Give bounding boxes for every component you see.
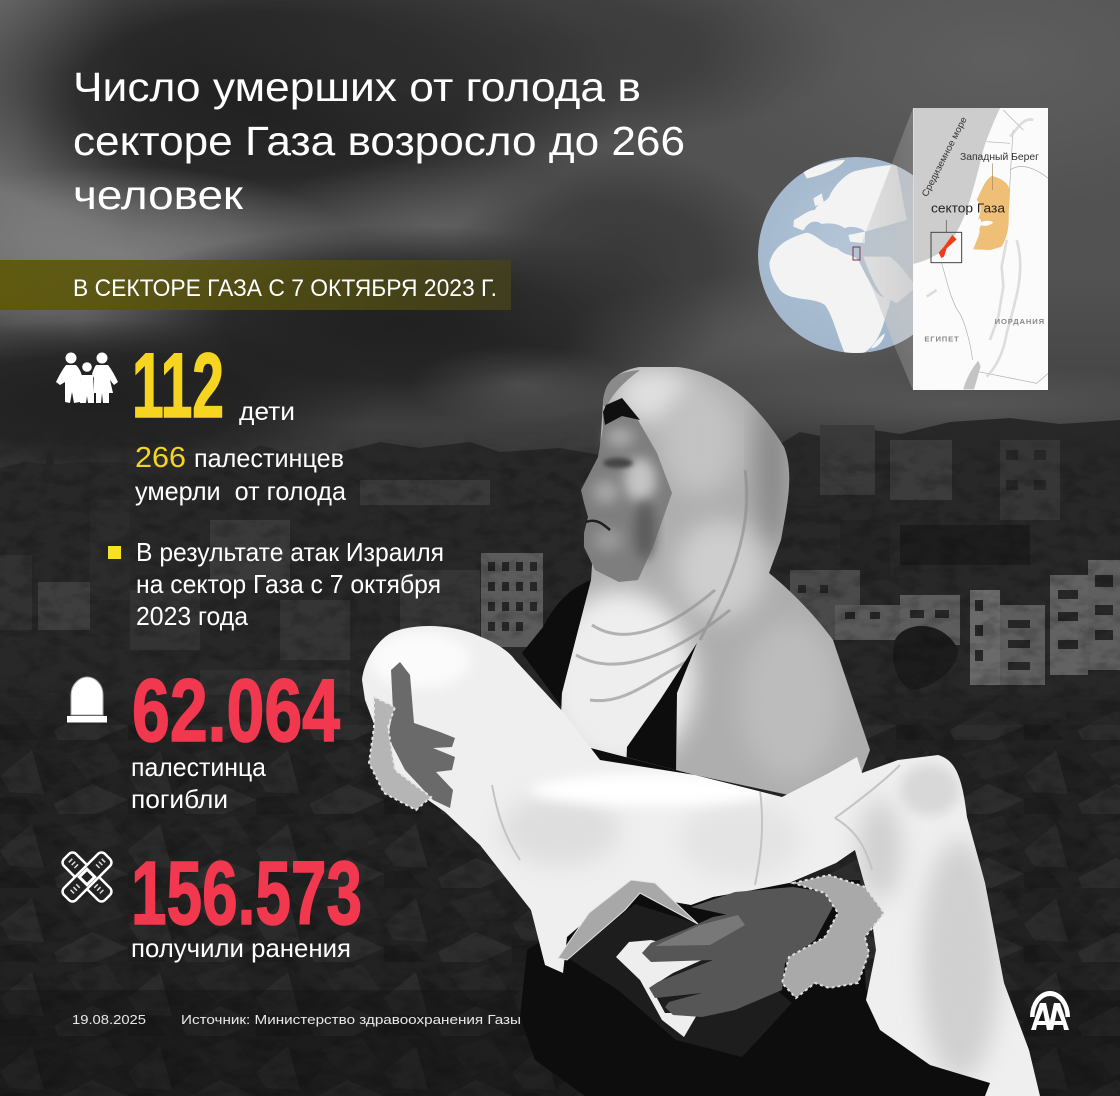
buildings: [0, 425, 1120, 760]
mediterranean sea: [913, 107, 1001, 264]
title: Число умерших от голода в: [73, 64, 641, 110]
dark cap under hood: [603, 398, 640, 425]
banner: since 7 October 2023: [0, 260, 511, 310]
footer: date and source: Источник: Министерство здравоохранения Газы: [181, 1012, 521, 1027]
map cone over globe: [860, 164, 913, 346]
banner: since 7 October 2023: В СЕКТОРЕ ГАЗА С 7 ОКТЯБРЯ 2023 Г.: [73, 275, 497, 302]
footer: date and source: 19.08.2025: [72, 1012, 146, 1027]
text: 266 palestinians starved: умерли от голода: [135, 476, 347, 506]
bullet text: attacks since 7 October: 2023 года: [136, 601, 249, 631]
left lace cuff: [369, 697, 431, 810]
text: 266 palestinians starved: 266: [135, 442, 186, 474]
gaza label: сектор Газа: [931, 202, 1006, 216]
skyline silhouette: [0, 418, 1120, 700]
sea label: Средиземное море: [920, 115, 969, 198]
bullet text: attacks since 7 October: В результате атак Израиля: [136, 537, 444, 567]
icon: crossed bandages: [46, 836, 128, 918]
face: [581, 410, 672, 582]
purse: [558, 880, 792, 1057]
number: 62.064 killed: [131, 660, 340, 814]
child wrapped in white cloth: [350, 615, 1050, 1096]
number: 112 children: 112: [132, 335, 224, 437]
gulf of aqaba: [963, 361, 981, 389]
west bank: [973, 176, 1009, 250]
map graphic: globe and inset: [758, 107, 1048, 390]
bullet text: attacks since 7 October: на сектор Газа с 7 октября: [136, 569, 441, 599]
title: [73, 64, 685, 218]
icon: family: [56, 352, 118, 403]
number: 62.064 killed: палестинца: [131, 752, 267, 782]
photo: woman carrying shrouded child: [350, 360, 1050, 1096]
icon: Anadolu Agency logo: [1030, 991, 1070, 1030]
left hand: [388, 662, 455, 808]
bullet text: attacks since 7 October: [108, 537, 444, 631]
icon: gravestone: [67, 677, 107, 722]
number: 156.573 wounded: 156.573: [131, 844, 362, 944]
finger highlight: [655, 915, 745, 946]
number: 62.064 killed: 62.064: [132, 660, 340, 760]
west bank label: Западный Берег: [960, 152, 1039, 163]
number: 156.573 wounded: получили ранения: [131, 933, 351, 963]
egypt label: ЕГИПЕТ: [924, 334, 960, 343]
inset map: [913, 107, 1048, 390]
text: 266 palestinians starved: палестинцев: [194, 443, 344, 473]
woman: headscarf: [561, 367, 870, 794]
gaza strip: [939, 235, 957, 258]
rubble and tents: [0, 712, 1120, 1096]
number: 156.573 wounded: [131, 844, 362, 963]
title: секторе Газа возросло до 266: [73, 118, 685, 164]
title: человек: [73, 172, 244, 218]
right hand: [642, 887, 835, 1017]
right lace cuff: [782, 875, 884, 998]
jordan label: ИОРДАНИЯ: [995, 317, 1045, 326]
number: 62.064 killed: погибли: [131, 784, 228, 814]
woman: dark dress: [520, 580, 990, 1096]
zoom cone: [860, 108, 913, 390]
globe: [758, 157, 913, 353]
hood edge: [603, 370, 640, 408]
text: 266 palestinians starved: [135, 442, 347, 506]
relief and borders: [942, 110, 1048, 383]
number: 112 children: дети: [239, 398, 295, 426]
handkerchief: [616, 940, 713, 1037]
footer: date and source: [72, 1012, 521, 1027]
gaza strip box: [931, 232, 962, 263]
